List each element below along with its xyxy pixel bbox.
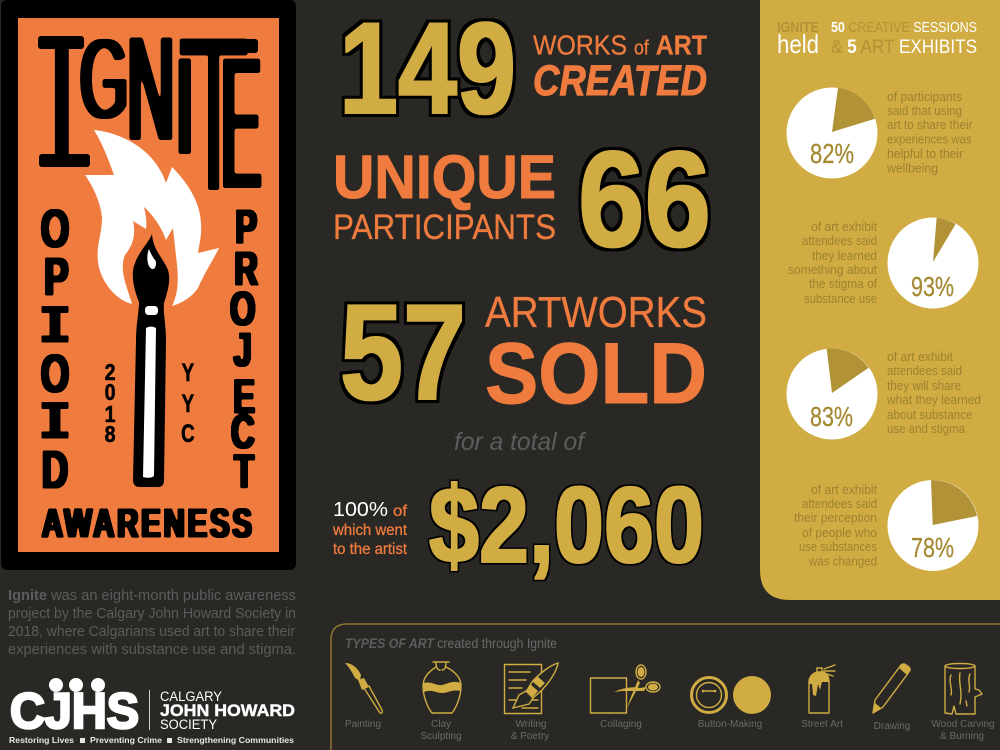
- poster text: Awareness: AWARENESS: [42, 500, 252, 546]
- text: for a total of: for a total of: [454, 428, 587, 456]
- poster text: 2018: 0: [105, 380, 116, 405]
- text: 83% description: of art exhibit: [887, 349, 953, 364]
- text: 82% description: said that using: [887, 103, 962, 118]
- icon: writing pen and paper: Writing: [516, 719, 546, 730]
- note: 100% to the artist: [332, 499, 408, 558]
- logo: CJHS: [9, 678, 295, 745]
- sidebar heading: & 5 ART EXHIBITS: [831, 37, 977, 58]
- poster text: Project: J: [234, 323, 252, 377]
- icon: spray can: [801, 665, 843, 730]
- icon: spray can: Street Art: [801, 719, 843, 730]
- poster text: Project: T: [234, 445, 254, 499]
- flame: [85, 130, 219, 306]
- text: 83% description: [886, 349, 981, 436]
- stat: 66 unique participants: 66: [578, 123, 711, 275]
- poster title: Ignite: G: [80, 16, 128, 143]
- logo: CJHS: CALGARY: [160, 689, 222, 704]
- text: 93% description: substance use: [804, 291, 877, 306]
- icon: collage and scissors: Collaging: [600, 719, 642, 730]
- brush: [133, 234, 169, 487]
- note: 100% to the artist: of: [393, 503, 408, 520]
- poster text: Opioid: O: [41, 198, 69, 259]
- intro paragraph: Ignite was an eight-month public awareness: [8, 588, 296, 604]
- text: 78% description: was changed: [808, 554, 877, 568]
- poster text: Opioid: O: [41, 343, 69, 404]
- icon: clay vase: Sculpting: [420, 731, 462, 742]
- intro paragraph: project by the Calgary John Howard Society in: [8, 606, 296, 622]
- text: 83% description: what they learned: [886, 392, 981, 407]
- icon: wood log: Wood Carving: [931, 719, 995, 730]
- note: 100% to the artist: 100%: [333, 499, 388, 521]
- icon: paintbrush: Painting: [345, 719, 381, 730]
- intro paragraph: 2018, where Calgarians used art to share their: [8, 624, 295, 640]
- icon: wood log: [931, 664, 995, 742]
- icon: writing pen and paper: & Poetry: [511, 731, 549, 742]
- text: 93% description: something about: [788, 262, 877, 277]
- text: 78% description: of art exhibit: [811, 482, 877, 497]
- stat: 66 unique participants: UNIQUE: [333, 143, 556, 211]
- intro paragraph: [8, 588, 296, 658]
- logo: CJHS: JOHN HOWARD: [160, 702, 295, 720]
- poster text: 2018: 2: [105, 360, 116, 385]
- text: 82% description: of participants: [887, 89, 962, 104]
- sidebar heading: IGNITE: [777, 20, 819, 36]
- stat: 66 unique participants: [333, 123, 711, 275]
- text: 78% description: [794, 482, 877, 568]
- pie: 93%: [888, 218, 978, 308]
- icon: pencil: Drawing: [874, 721, 910, 732]
- poster text: Opioid: P: [44, 246, 69, 307]
- poster text: YYC: Y: [182, 389, 194, 418]
- text: 83% description: about substance: [887, 407, 972, 422]
- sidebar heading: held: [777, 29, 819, 59]
- text: 83% description: use and stigma: [887, 421, 966, 436]
- stat: 57 artworks sold: [340, 276, 707, 428]
- icon: clay vase: Clay: [431, 719, 451, 730]
- poster text: Opioid: I: [39, 298, 71, 359]
- text: 93% description: [788, 219, 877, 306]
- note: 100% to the artist: to the artist: [333, 541, 408, 558]
- poster text: Project: P: [235, 200, 257, 254]
- pie: 93%: 93%: [911, 271, 954, 302]
- sidebar heading: 50 CREATIVE SESSIONS: [831, 19, 977, 36]
- sidebar heading: [777, 19, 977, 59]
- stat: 57 artworks sold: SOLD: [485, 326, 707, 422]
- types heading: TYPES OF ART created through Ignite: [345, 635, 557, 651]
- poster title: Ignite: I: [50, 0, 74, 206]
- poster text: Project: R: [234, 242, 258, 296]
- icon: collage and scissors: [590, 665, 660, 730]
- icon: paintbrush: [345, 663, 382, 730]
- panel: outcomes: [760, 0, 1000, 600]
- intro paragraph: experiences with substance use and stigma.: [8, 642, 296, 658]
- icon: clay vase: [420, 662, 462, 742]
- pie: 82%: [786, 88, 878, 178]
- text: 93% description: attendees said: [802, 233, 877, 248]
- poster text: YYC: C: [181, 419, 195, 448]
- text: 83% description: attendees said: [887, 363, 962, 378]
- stat: 57 artworks sold: ARTWORKS: [485, 288, 707, 337]
- poster text: Project: E: [233, 370, 255, 424]
- icon: button making: [692, 676, 771, 730]
- poster text: Opioid: D: [42, 439, 68, 500]
- stat: 149 works of art created: [339, 0, 707, 141]
- icon: writing pen and paper: [504, 663, 558, 742]
- pie: 83%: [786, 348, 878, 440]
- pie: 82%: 82%: [810, 138, 854, 169]
- text: 82% description: [886, 89, 973, 176]
- panel: types of art: [331, 624, 1000, 750]
- pie: 78%: [888, 480, 978, 571]
- poster title: Ignite: N: [127, 7, 175, 172]
- pie: 83%: 83%: [810, 401, 853, 432]
- text: 78% description: of people who: [802, 525, 877, 540]
- logo: CJHS: Preventing Crime: [90, 735, 162, 745]
- text: 83% description: they will share: [887, 378, 961, 393]
- text: 82% description: helpful to their: [887, 146, 964, 161]
- text: 93% description: they learned: [812, 248, 877, 263]
- text: 82% description: experiences was: [887, 132, 972, 146]
- poster text: 2018: 1: [105, 402, 116, 427]
- poster text: Opioid: [39, 198, 71, 500]
- stat: $2,060: $2,060: [429, 464, 704, 585]
- logo: CJHS: SOCIETY: [160, 717, 217, 732]
- text: 82% description: wellbeing: [886, 160, 938, 176]
- poster text: Project: C: [231, 405, 255, 459]
- logo: CJHS: Strengthening Communities: [177, 735, 294, 745]
- poster title: Ignite: E: [221, 18, 261, 228]
- text: 78% description: their perception: [794, 510, 877, 525]
- stat: 66 unique participants: PARTICIPANTS: [333, 208, 556, 247]
- icon: pencil: [873, 664, 910, 732]
- poster text: Project: [230, 200, 258, 499]
- text: 82% description: art to share their: [887, 117, 973, 132]
- text: 78% description: attendees said: [802, 496, 877, 511]
- note: 100% to the artist: which went: [332, 522, 408, 539]
- panel: poster: [1, 0, 296, 570]
- text: 93% description: of art exhibit: [811, 219, 877, 234]
- logo: CJHS: Restoring Lives: [9, 735, 74, 745]
- icon: button making: Button-Making: [698, 719, 762, 730]
- text: 78% description: use substances: [799, 539, 877, 554]
- stat: 57 artworks sold: 57: [340, 276, 466, 428]
- poster text: Opioid: I: [39, 394, 71, 455]
- poster text: 2018: 8: [105, 422, 116, 447]
- stat: 149 works of art created: CREATED: [533, 57, 707, 105]
- stat: 149 works of art created: WORKS of ART: [533, 30, 707, 60]
- text: 93% description: the stigma of: [809, 276, 877, 291]
- poster text: Project: O: [230, 282, 255, 336]
- poster title: Ignite: I: [175, 29, 194, 184]
- logo: CJHS: CJHS: [10, 683, 139, 739]
- poster text: YYC: Y: [182, 358, 194, 387]
- poster title: Ignite: [38, 0, 261, 237]
- icon: wood log: & Burning: [940, 731, 984, 742]
- pie: 78%: 78%: [911, 532, 954, 563]
